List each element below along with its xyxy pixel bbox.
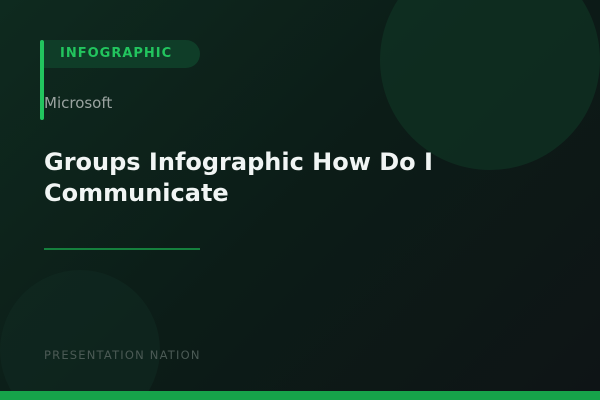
subtitle: Microsoft	[44, 94, 112, 112]
badge: INFOGRAPHIC	[60, 46, 172, 61]
badge	[44, 40, 200, 68]
footer text: PRESENTATION NATION	[44, 348, 201, 362]
accent bar	[40, 40, 44, 120]
title: Groups Infographic How Do I Communicate	[44, 148, 433, 207]
divider	[44, 248, 200, 250]
decorative circle top-right	[380, 0, 600, 170]
bottom bar	[0, 391, 600, 400]
decorative circle bottom-left	[0, 270, 160, 400]
